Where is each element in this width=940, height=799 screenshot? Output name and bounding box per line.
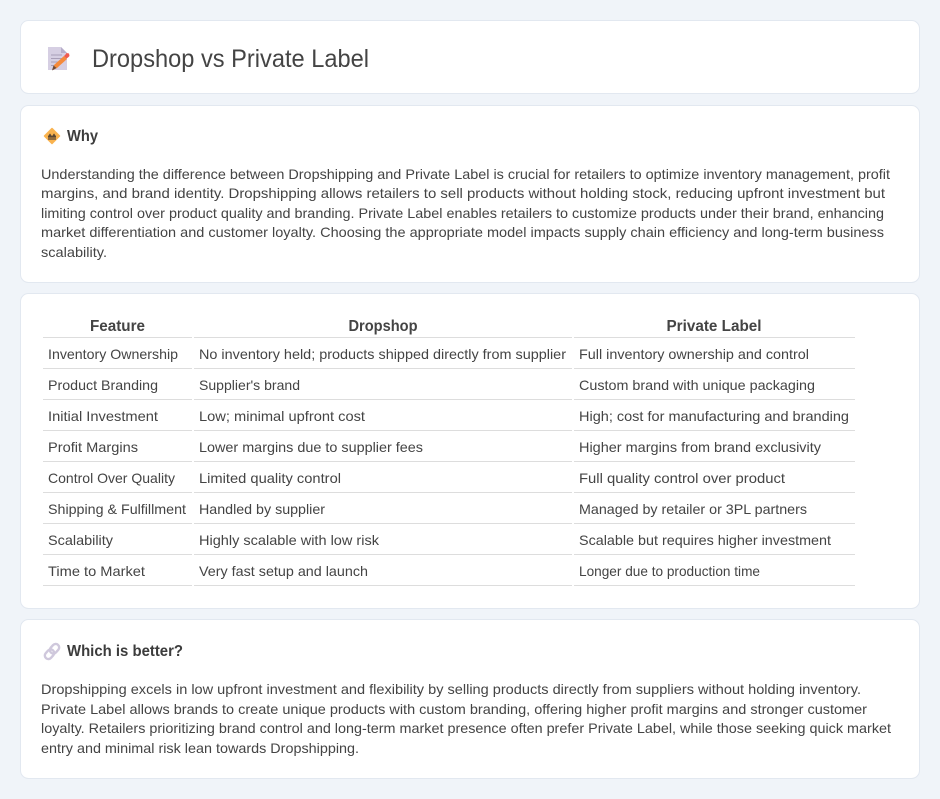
row: time to market: Longer due to production time bbox=[579, 563, 760, 579]
row: shipping and fulfillment: Shipping & Fulfillment bbox=[48, 501, 186, 517]
row: profit margins: Profit Margins bbox=[48, 439, 138, 455]
text block: which is better paragraph: Private Label allows brands to create unique products with custom branding, offering higher profit margins and stronger customer bbox=[41, 701, 867, 717]
text block: which is better paragraph: Dropshipping excels in low upfront investment and flexibility by selling products directly from suppliers without holding inventory. bbox=[41, 681, 861, 697]
table header row: Private Label bbox=[666, 318, 762, 335]
row: scalability: Highly scalable with low risk bbox=[199, 532, 380, 548]
row: inventory ownership bbox=[43, 346, 855, 369]
row: control over quality: Control Over Quality bbox=[48, 470, 175, 486]
row: product branding: Product Branding bbox=[48, 377, 158, 393]
heading: which is better: Which is better? bbox=[67, 643, 183, 660]
table header row: Feature bbox=[90, 318, 145, 335]
text block: which is better paragraph bbox=[41, 681, 891, 756]
row: product branding bbox=[43, 377, 855, 400]
text block: why paragraph: scalability. bbox=[41, 244, 107, 260]
row: time to market: Time to Market bbox=[48, 563, 145, 579]
panel: comparison table bbox=[20, 294, 920, 608]
row: profit margins: Higher margins from brand exclusivity bbox=[579, 439, 821, 455]
icon: memo with pencil bbox=[48, 47, 70, 70]
text block: why paragraph bbox=[41, 166, 890, 260]
row: inventory ownership: Inventory Ownership bbox=[48, 346, 178, 362]
text block: why paragraph: margins, and brand identity. Dropshipping allows retailers to sell products without holding stock, reducing upfront investment but bbox=[41, 185, 885, 201]
text block: why paragraph: market differentiation and customer loyalty. Choosing the appropriate model impacts supply chain efficiency and long-term business bbox=[41, 224, 884, 240]
row: initial investment: Initial Investment bbox=[48, 408, 158, 424]
panel: title header bbox=[20, 20, 920, 94]
icon: diamond warning sign bbox=[44, 128, 60, 144]
panel: which is better bbox=[20, 620, 920, 778]
text block: which is better paragraph: loyalty. Retailers prioritizing brand control and long-term market presence often prefer Private Label, while those seeking quick market bbox=[41, 720, 891, 736]
row: scalability bbox=[43, 532, 855, 555]
row: profit margins bbox=[43, 439, 855, 462]
row: inventory ownership: Full inventory ownership and control bbox=[579, 346, 809, 362]
icon: chain link bbox=[43, 643, 61, 660]
row: control over quality: Full quality control over product bbox=[579, 470, 785, 486]
row: shipping and fulfillment bbox=[43, 501, 855, 524]
row: profit margins: Lower margins due to supplier fees bbox=[199, 439, 423, 455]
table header row bbox=[43, 318, 855, 338]
row: initial investment bbox=[43, 408, 855, 431]
row: inventory ownership: No inventory held; products shipped directly from supplier bbox=[199, 346, 566, 362]
text block: why paragraph: Understanding the difference between Dropshipping and Private Label is crucial for retailers to optimize inventory management, profit bbox=[41, 166, 890, 182]
row: product branding: Custom brand with unique packaging bbox=[579, 377, 815, 393]
row: shipping and fulfillment: Handled by supplier bbox=[199, 501, 325, 517]
panel: why bbox=[20, 106, 920, 282]
row: time to market bbox=[43, 563, 855, 586]
row: control over quality bbox=[43, 470, 855, 493]
row: product branding: Supplier's brand bbox=[199, 377, 300, 393]
row: shipping and fulfillment: Managed by retailer or 3PL partners bbox=[579, 501, 807, 517]
row: scalability: Scalability bbox=[48, 532, 113, 548]
row: control over quality: Limited quality control bbox=[199, 470, 341, 486]
text block: which is better paragraph: entry and minimal risk lean towards Dropshipping. bbox=[41, 740, 359, 756]
text block: why paragraph: limiting control over product quality and branding. Private Label enables retailers to customize products under their brand, enhancing bbox=[41, 205, 884, 221]
row: time to market: Very fast setup and launch bbox=[199, 563, 368, 579]
heading: why: Why bbox=[67, 128, 98, 145]
row: initial investment: Low; minimal upfront cost bbox=[199, 408, 365, 424]
table header row: Dropshop bbox=[348, 318, 418, 335]
title: Dropshop vs Private Label bbox=[92, 45, 369, 73]
row: scalability: Scalable but requires higher investment bbox=[579, 532, 831, 548]
row: initial investment: High; cost for manufacturing and branding bbox=[579, 408, 849, 424]
